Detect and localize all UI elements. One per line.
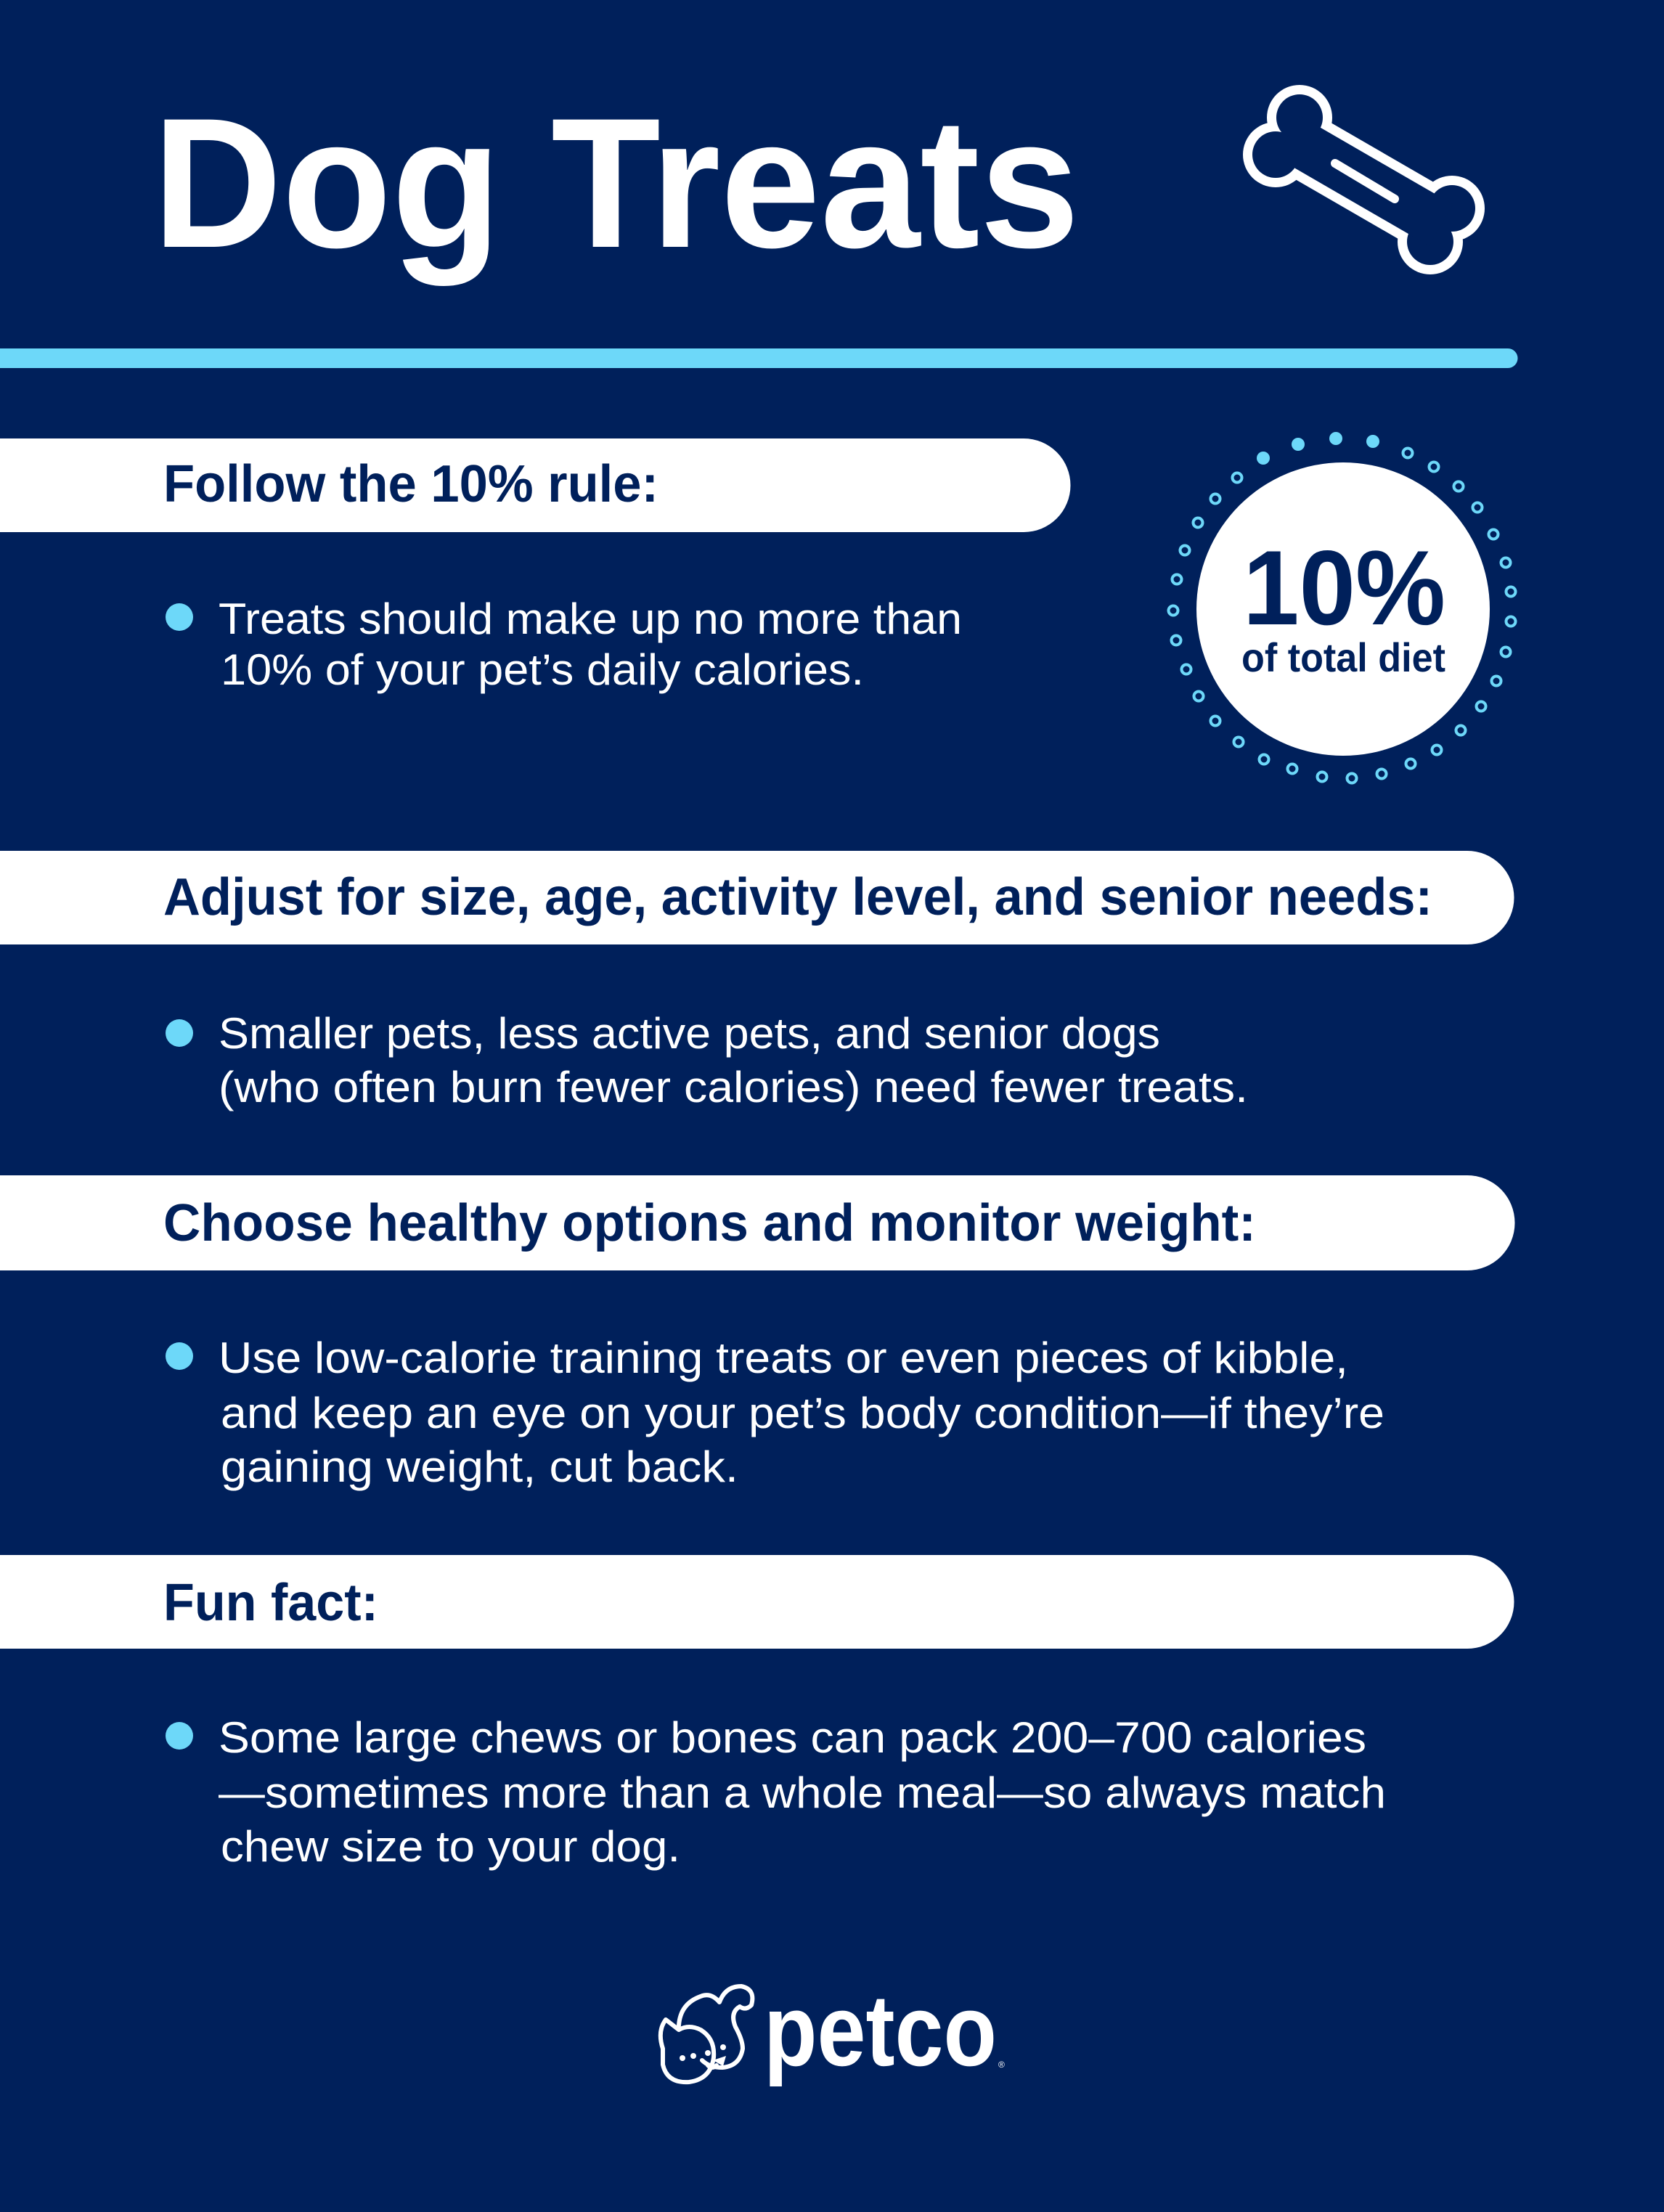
- bullet text 4: [166, 1713, 1386, 1871]
- bullet text 1: [166, 595, 962, 694]
- icon: bone: [1243, 85, 1485, 274]
- bullet text 1: Treats should make up no more than: [219, 595, 962, 643]
- bullet text 3: and keep an eye on your pet’s body condition—if they’re: [221, 1389, 1384, 1437]
- section 1: follow the 10% rule: [0, 438, 1070, 694]
- heading pill 1: [0, 438, 1070, 532]
- dot ring: [1257, 432, 1379, 465]
- heading pill 2: Adjust for size, age, activity level, and senior needs:: [163, 868, 1432, 926]
- heading pill 3: [0, 1175, 1514, 1270]
- bullet text 3: Use low-calorie training treats or even pieces of kibble,: [219, 1334, 1348, 1382]
- badge: 10% of total diet: 10%: [1243, 528, 1445, 647]
- bullet text 3: [166, 1334, 1384, 1491]
- bullet text 4: Some large chews or bones can pack 200–700 calories: [219, 1713, 1366, 1762]
- logo: petco: petco: [764, 1973, 997, 2087]
- heading pill 4: [0, 1555, 1514, 1649]
- icon: cat and dog: [661, 1986, 752, 2082]
- title: Dog Treats: [152, 80, 1080, 287]
- heading pill 1: Follow the 10% rule:: [163, 455, 658, 513]
- heading pill 4: Fun fact:: [163, 1574, 378, 1632]
- badge: 10% of total diet: [1169, 432, 1516, 783]
- heading pill 2: [0, 851, 1514, 944]
- bullet text 2: Smaller pets, less active pets, and senior dogs: [219, 1009, 1160, 1058]
- section 3: choose healthy options: [0, 1175, 1514, 1491]
- bullet text 4: chew size to your dog.: [221, 1822, 680, 1871]
- bullet text 3: gaining weight, cut back.: [221, 1442, 738, 1491]
- heading pill 3: Choose healthy options and monitor weight:: [163, 1194, 1256, 1252]
- logo: petco: [661, 1973, 1005, 2087]
- bullet text 1: 10% of your pet’s daily calories.: [221, 645, 864, 694]
- bullet text 2: [166, 1009, 1248, 1111]
- bullet text 4: —sometimes more than a whole meal—so always match: [219, 1768, 1386, 1817]
- section 4: fun fact: [0, 1555, 1514, 1871]
- badge: 10% of total diet: of total diet: [1241, 634, 1445, 680]
- bullet text 2: (who often burn fewer calories) need fewer treats.: [219, 1063, 1248, 1111]
- logo: petco: ®: [998, 2060, 1005, 2070]
- section 2: adjust for size: [0, 851, 1514, 1111]
- cyan divider bar: [0, 348, 1517, 368]
